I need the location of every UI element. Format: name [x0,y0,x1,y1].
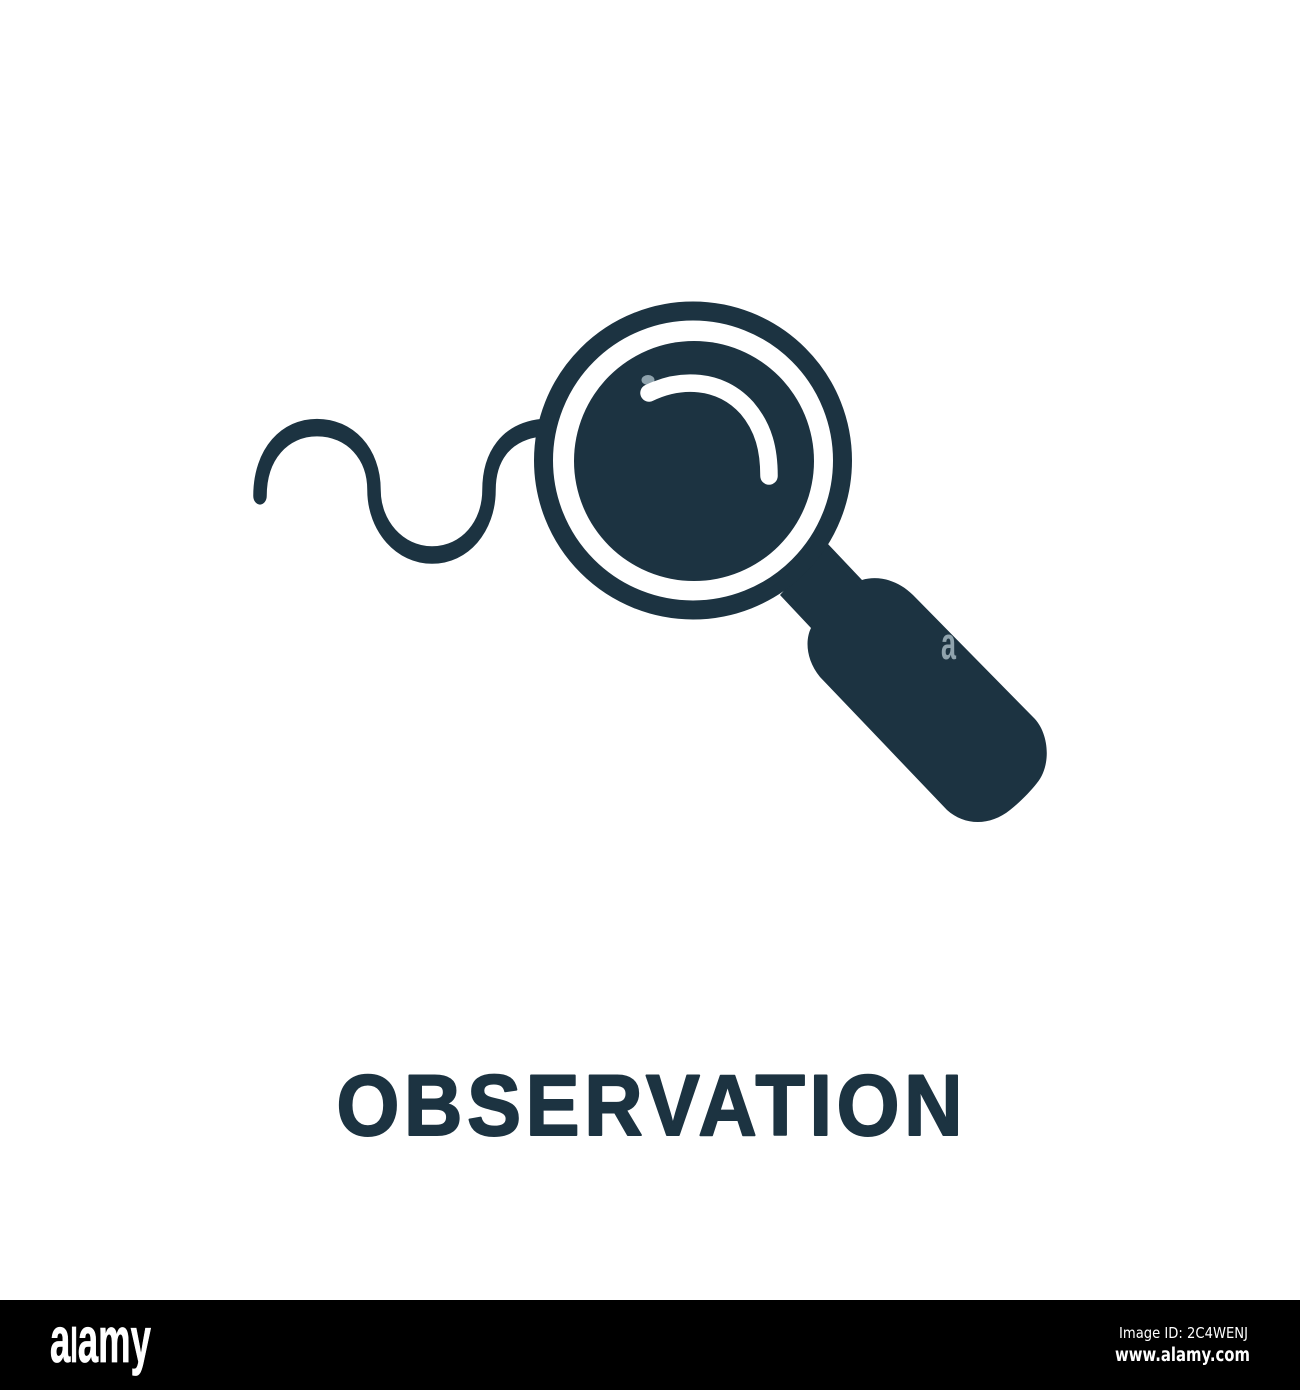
footer bar [0,1300,1300,1390]
footer logo: alamy [50,1305,151,1377]
title: OBSERVATION [337,1057,963,1154]
icon: lens highlight [649,383,769,476]
icon: handle [780,543,1047,822]
icon: lens rim [544,311,842,610]
footer website: www.alamy.com [1115,1345,1250,1366]
icon: lens glass [574,341,814,581]
icon: magnifying glass with wavy cord [260,311,1047,822]
footer image id: Image ID: 2C4WENJ [1119,1324,1248,1342]
watermark mark on handle: a [941,618,957,669]
icon: wavy cord [260,428,542,555]
watermark fragment above highlight [642,375,654,385]
